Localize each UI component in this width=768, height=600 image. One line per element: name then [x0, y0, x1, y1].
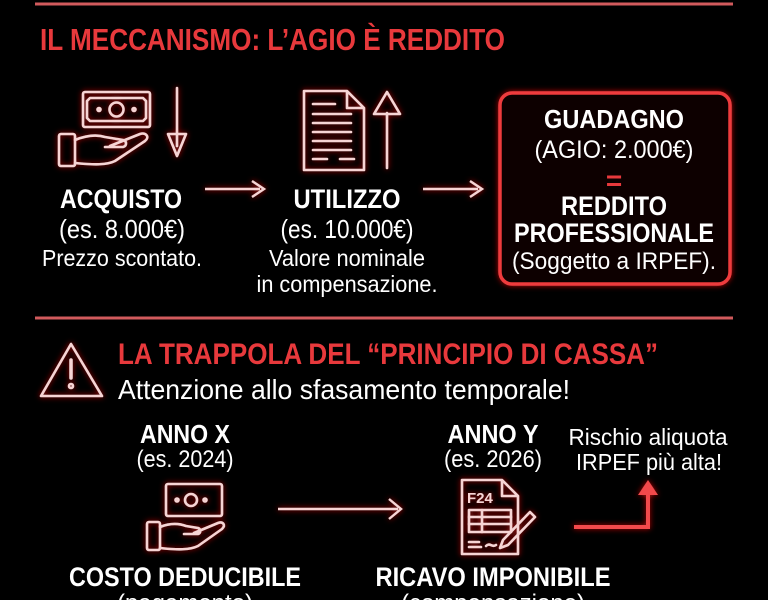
text block: utilizzo: Valore nominale	[269, 245, 425, 271]
callout box: guadagno: GUADAGNO	[544, 104, 684, 134]
text block: acquisto: (es. 8.000€)	[59, 214, 185, 244]
text: anno x	[136, 419, 234, 473]
callout box: guadagno: REDDITO	[561, 191, 667, 221]
callout: rischio	[568, 424, 728, 475]
icon: money hand small	[147, 484, 224, 550]
text block: acquisto	[42, 184, 202, 271]
text: costo deducibile: COSTO DEDUCIBILE	[69, 562, 301, 592]
callout box: guadagno: (AGIO: 2.000€)	[534, 136, 694, 164]
icon: warning triangle	[41, 344, 102, 396]
text: anno y: (es. 2026)	[444, 446, 542, 473]
text block: utilizzo	[256, 184, 438, 297]
text: anno x: (es. 2024)	[136, 446, 234, 473]
callout box: guadagno	[500, 93, 730, 284]
arrow 1	[205, 181, 264, 197]
icon: hand with money	[59, 88, 186, 166]
text block: acquisto: ACQUISTO	[60, 184, 182, 214]
callout box: guadagno: PROFESSIONALE	[514, 218, 714, 248]
callout box: guadagno: =	[606, 165, 622, 196]
text block: utilizzo: in compensazione.	[256, 271, 438, 297]
text: anno y	[444, 419, 542, 473]
title: trappola: LA TRAPPOLA DEL “PRINCIPIO DI CASSA”	[118, 338, 658, 371]
text: ricavo imponibile: RICAVO IMPONIBILE	[376, 562, 610, 592]
arrow 2	[423, 181, 482, 197]
icon: F24 form: F24	[467, 490, 494, 507]
text block: utilizzo: UTILIZZO	[294, 184, 400, 214]
arrow: anno x to anno y	[278, 499, 401, 519]
callout box: guadagno: (Soggetto a IRPEF).	[512, 248, 716, 275]
callout: rischio: IRPEF più alta!	[576, 449, 722, 475]
text: anno y: ANNO Y	[448, 419, 538, 449]
text: anno x: ANNO X	[140, 419, 231, 449]
text block: acquisto: Prezzo scontato.	[42, 245, 202, 271]
arrow: red elbow up	[574, 480, 658, 527]
subtitle: Attenzione allo sfasamento temporale!	[118, 374, 570, 405]
icon: F24 form	[462, 480, 535, 554]
title: meccanismo: IL MECCANISMO: L’AGIO È REDDITO	[40, 22, 505, 57]
text block: utilizzo: (es. 10.000€)	[280, 214, 414, 244]
icon: document with up arrow	[304, 91, 400, 170]
callout: rischio: Rischio aliquota	[568, 424, 728, 450]
